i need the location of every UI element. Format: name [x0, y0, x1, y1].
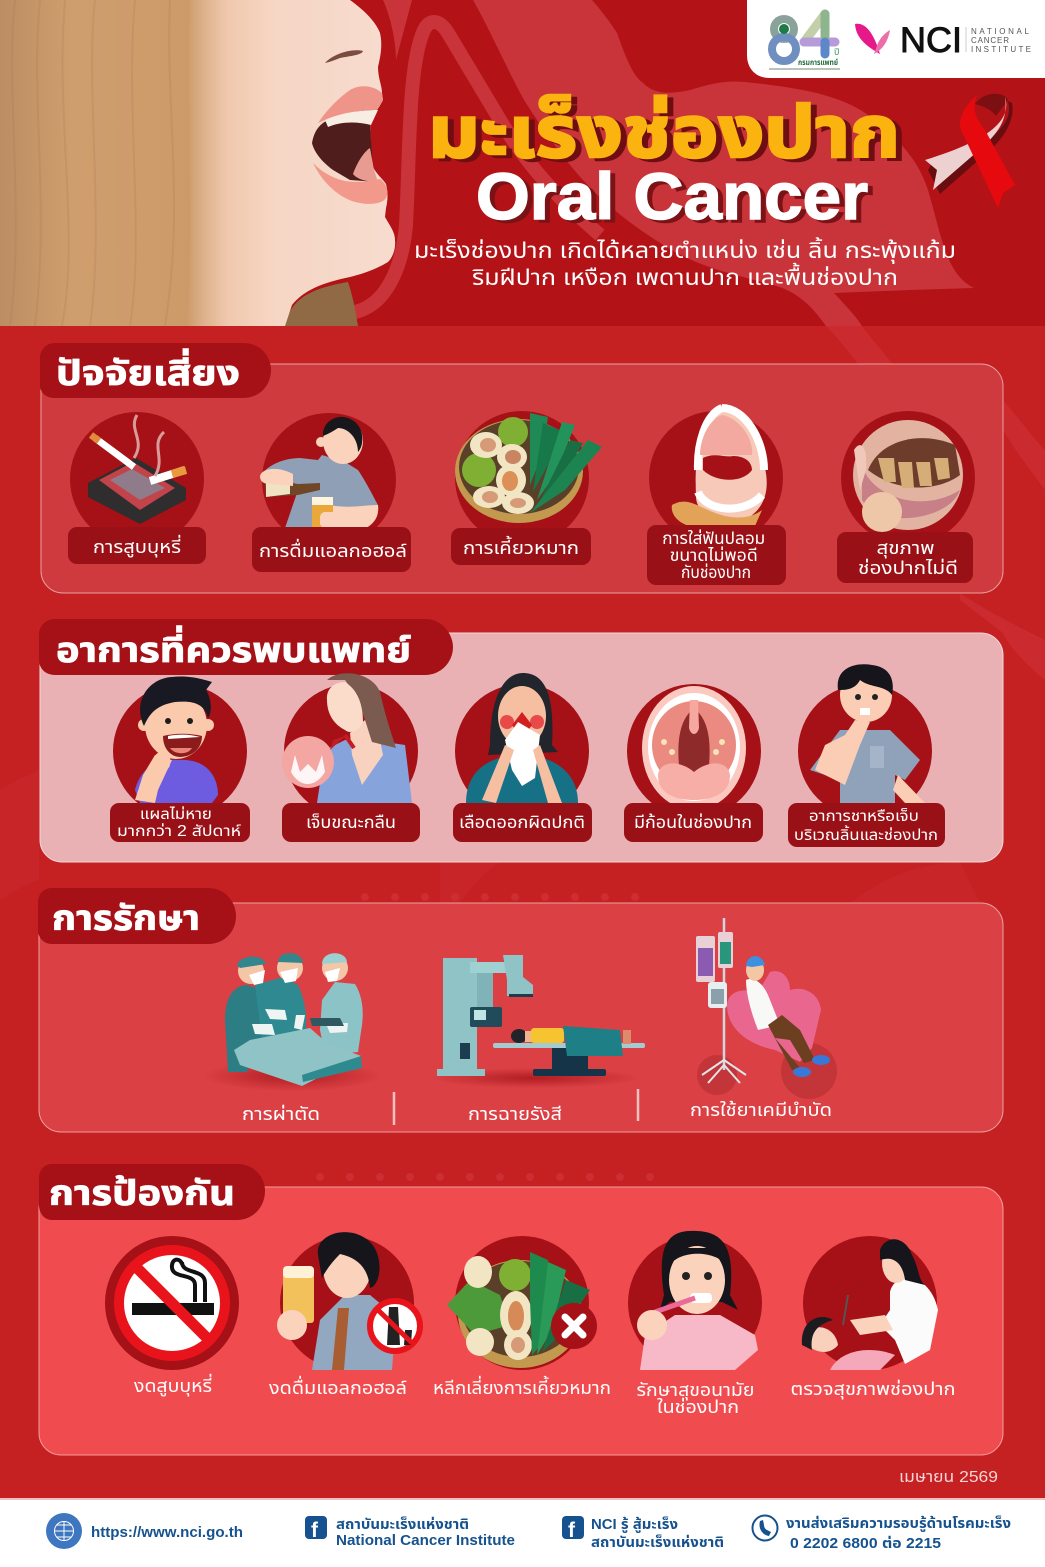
label: ill-fitting dentures: กับช่องปาก — [681, 564, 751, 582]
facebook name 2: สถาบันมะเร็งแห่งชาติ — [591, 1534, 724, 1551]
logo: 84 years — [769, 14, 840, 70]
label: poor oral health: สุขภาพ — [876, 538, 934, 559]
label: numbness or pain: อาการชาหรือเจ็บ — [809, 807, 919, 825]
icon: facebook — [562, 1516, 584, 1542]
icon: woman brushing teeth — [628, 1231, 762, 1370]
label: ill-fitting dentures — [647, 525, 786, 585]
label: oral hygiene: รักษาสุขอนามัย — [636, 1380, 754, 1401]
label: poor oral health: ช่องปากไม่ดี — [858, 558, 958, 578]
logo: 84 years: ปี — [833, 47, 839, 57]
label: sore over 2 weeks — [110, 803, 250, 842]
label: lump in mouth — [624, 803, 763, 842]
contact text: งานส่งเสริมความรอบรู้ด้านโรคมะเร็ง — [786, 1515, 1011, 1533]
label: sore over 2 weeks: แผลไม่หาย — [140, 805, 212, 823]
title: Oral Cancer — [481, 162, 873, 236]
header background — [0, 0, 1045, 326]
icon: ashtray and cigarettes — [70, 412, 204, 546]
label: numbness or pain: บริเวณลิ้นและช่องปาก — [794, 825, 938, 844]
heading: prevention — [39, 1164, 265, 1220]
panel: treatment — [38, 888, 1003, 1132]
label: oral hygiene: ในช่องปาก — [657, 1397, 739, 1417]
icon: man pouring alcohol — [260, 413, 396, 547]
icon: woman with sore throat — [282, 673, 418, 818]
heading: prevention: การป้องกัน — [49, 1174, 235, 1213]
label: sore over 2 weeks: มากกว่า 2 สัปดาห์ — [117, 822, 241, 840]
facebook name 2: NCI รู้ สู้มะเร็ง — [591, 1517, 678, 1534]
icon: ribbon — [925, 94, 1015, 208]
facebook name 1 — [336, 1516, 515, 1549]
label: no smoking: งดสูบบุหรี่ — [134, 1373, 212, 1398]
label: poor oral health — [837, 532, 973, 583]
title: มะเร็งช่องปาก — [428, 93, 900, 173]
label: no alcohol: งดดื่มแอลกอฮอล์ — [269, 1375, 407, 1398]
icon: dentures — [649, 405, 783, 545]
icon: avoid betel chewing — [447, 1236, 597, 1370]
heading: risk factors — [40, 343, 271, 398]
icon: facebook: f — [568, 1519, 576, 1542]
label: surgery: การผ่าตัด — [242, 1104, 320, 1124]
icon: phone — [752, 1516, 778, 1540]
label: avoid betel: หลีกเลี่ยงการเคี้ยวหมาก — [433, 1375, 611, 1398]
label: numbness or pain — [788, 803, 945, 847]
logo panel — [747, 0, 1045, 78]
icon: globe — [46, 1513, 82, 1549]
icon: chemotherapy chair and IV — [696, 918, 837, 1099]
panel: symptoms — [39, 619, 1003, 862]
label: ill-fitting dentures: การใส่ฟันปลอม — [662, 530, 765, 548]
label: abnormal bleeding — [453, 803, 592, 842]
panel: prevention — [39, 1164, 1003, 1455]
label: smoking — [68, 527, 206, 564]
body background decoration — [0, 326, 1045, 903]
logo: NCI: CANCER — [971, 36, 1009, 45]
icon: radiation machine — [430, 955, 645, 1088]
icon: surgery team — [204, 953, 380, 1091]
logo: 84 years: กรมการแพทย์ — [798, 58, 838, 67]
label: betel chewing — [451, 528, 591, 565]
label: ill-fitting dentures: ขนาดไม่พอดี — [670, 547, 758, 565]
label: pain swallowing — [282, 803, 420, 842]
icon: dental check-up — [802, 1236, 938, 1370]
heading: treatment: การรักษา — [52, 899, 200, 938]
icon: facebook: f — [311, 1519, 319, 1542]
description text: มะเร็งช่องปาก เกิดได้หลายตำแหน่ง เช่น ลิ้น กระพุ้งแก้ม — [414, 236, 956, 264]
heading: risk factors: ปัจจัยเสี่ยง — [56, 348, 240, 393]
icon: facebook — [305, 1516, 327, 1542]
icon: boy with mouth sore — [113, 677, 247, 818]
facebook name 2 — [591, 1517, 724, 1551]
icon: open mouth with lump — [627, 684, 761, 818]
label: chemotherapy: การใช้ยาเคมีบำบัด — [690, 1100, 832, 1120]
website: https://www.nci.go.th — [91, 1524, 243, 1541]
icon: no smoking sign — [105, 1236, 239, 1370]
logo: NCI: NATIONAL — [971, 27, 1030, 36]
icon: woman with bleeding nose — [455, 673, 589, 818]
title: Oral Cancer — [476, 159, 868, 233]
contact text: 0 2202 6800 ต่อ 2215 — [790, 1535, 941, 1552]
label: abnormal bleeding: เลือดออกผิดปกติ — [459, 813, 585, 832]
description text: ริมฝีปาก เหงือก เพดานปาก และพื้นช่องปาก — [472, 262, 898, 290]
photo: woman with open mouth — [0, 0, 395, 326]
contact text — [786, 1515, 1011, 1552]
label: smoking: การสูบบุหรี่ — [93, 534, 181, 559]
description text — [414, 236, 956, 290]
footer — [0, 1498, 1045, 1567]
label: lump in mouth: มีก้อนในช่องปาก — [634, 812, 752, 832]
icon: man refusing alcohol — [277, 1232, 420, 1370]
label: pain swallowing: เจ็บขณะกลืน — [306, 813, 396, 832]
label: radiation: การฉายรังสี — [468, 1104, 562, 1124]
icon: man with numb mouth — [798, 664, 932, 818]
facebook name 1: National Cancer Institute — [336, 1533, 515, 1549]
logo: NCI — [855, 21, 1031, 60]
icon: betel nut tray — [455, 411, 602, 545]
decorative dot pattern — [316, 893, 654, 1181]
logo: NCI: INSTITUTE — [971, 45, 1031, 54]
heading: treatment — [38, 888, 236, 944]
title — [428, 93, 906, 236]
date: เมษายน 2569 — [899, 1469, 998, 1486]
icon: poor oral health photo — [841, 411, 975, 545]
label: alcohol — [252, 527, 411, 572]
label: oral check-up: ตรวจสุขภาพช่องปาก — [790, 1379, 956, 1400]
logo: NCI: NCI — [900, 21, 962, 60]
title: มะเร็งช่องปาก — [434, 96, 906, 176]
heading: symptoms — [39, 619, 453, 675]
label: alcohol: การดื่มแอลกอฮอล์ — [259, 538, 407, 561]
heading: symptoms: อาการที่ควรพบแพทย์ — [56, 625, 411, 670]
panel: risk factors — [40, 343, 1003, 593]
label: betel chewing: การเคี้ยวหมาก — [463, 535, 579, 558]
facebook name 1: สถาบันมะเร็งแห่งชาติ — [336, 1516, 469, 1533]
